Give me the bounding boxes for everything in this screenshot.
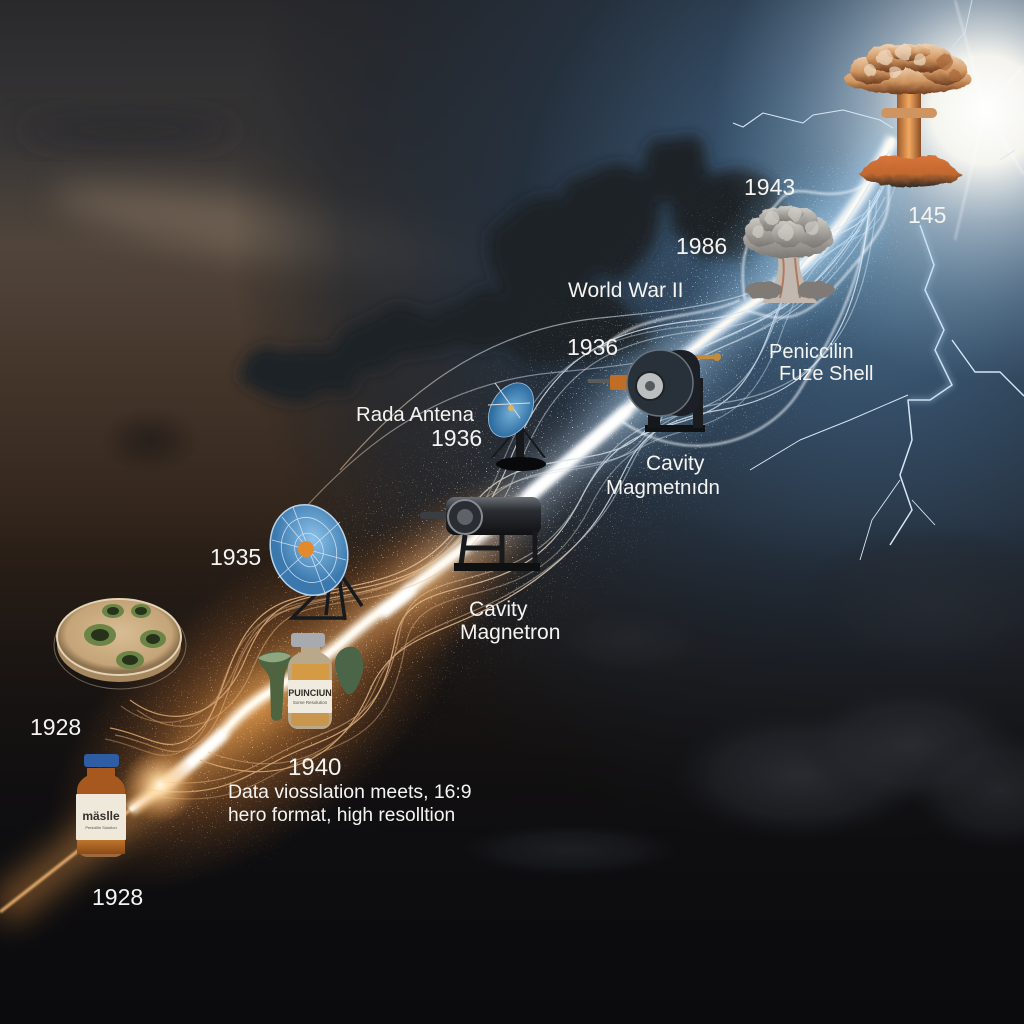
label: World War II: World War II xyxy=(568,279,684,302)
year 1928 upper: 1928 xyxy=(30,714,81,740)
icon: bottom vial xyxy=(76,754,126,857)
lightning bolts xyxy=(733,0,1024,560)
storm clouds xyxy=(100,134,1024,876)
year 1935: 1935 xyxy=(210,544,261,570)
year 1943: 1943 xyxy=(744,174,795,200)
year 1936 by antenna: 1936 xyxy=(431,425,482,451)
year 1936 upper: 1936 xyxy=(567,334,618,360)
energy stream xyxy=(0,138,898,912)
year 145: 145 xyxy=(908,202,946,228)
sparkle particles xyxy=(120,160,890,840)
lower-right clouds xyxy=(460,525,1024,876)
caption: data visualisation: Data viosslation meets, 16:9 xyxy=(228,781,472,803)
icon: penicillin bottle with plants: PUINCIUN xyxy=(288,688,332,698)
amber haze behind stream xyxy=(0,109,948,962)
year 1986: 1986 xyxy=(676,233,727,259)
label: magnetron upper: Magmetnıdn xyxy=(606,476,720,499)
year 1928 lower: 1928 xyxy=(92,884,143,910)
icon: cavity magnetron motor xyxy=(588,350,721,432)
label: radar antenna: Rada Antena xyxy=(356,404,475,426)
icon: magnetron machine xyxy=(420,497,541,571)
icon: large radar dish xyxy=(259,495,362,620)
icon: bottom vial: Penicillin Solution xyxy=(85,825,117,830)
glow at first vial xyxy=(122,747,198,823)
label group: timeline years and captions xyxy=(30,174,946,910)
glowing sun burst xyxy=(715,0,1024,380)
icon: penicillin bottle with plants: Some Resolution xyxy=(293,700,328,705)
label: cavity magnetron upper: Cavity xyxy=(646,452,705,475)
icon: grey mushroom cloud xyxy=(743,206,835,303)
label: magnetron lower: Magnetron xyxy=(460,621,560,644)
icon: penicillin bottle with plants xyxy=(258,633,363,729)
label: cavity magnetron lower: Cavity xyxy=(469,598,528,621)
label: penicillin: Peniccilin xyxy=(769,341,853,363)
icon: petri dish xyxy=(54,599,186,689)
year 1940: 1940 xyxy=(288,754,341,781)
caption: hero format: hero format, high resolltion xyxy=(228,805,455,826)
label: fuze shell: Fuze Shell xyxy=(779,363,874,385)
icon: bottom vial: mäslle xyxy=(82,809,120,823)
icon: small radar antenna xyxy=(479,375,546,471)
icon: orange mushroom cloud xyxy=(844,44,972,187)
